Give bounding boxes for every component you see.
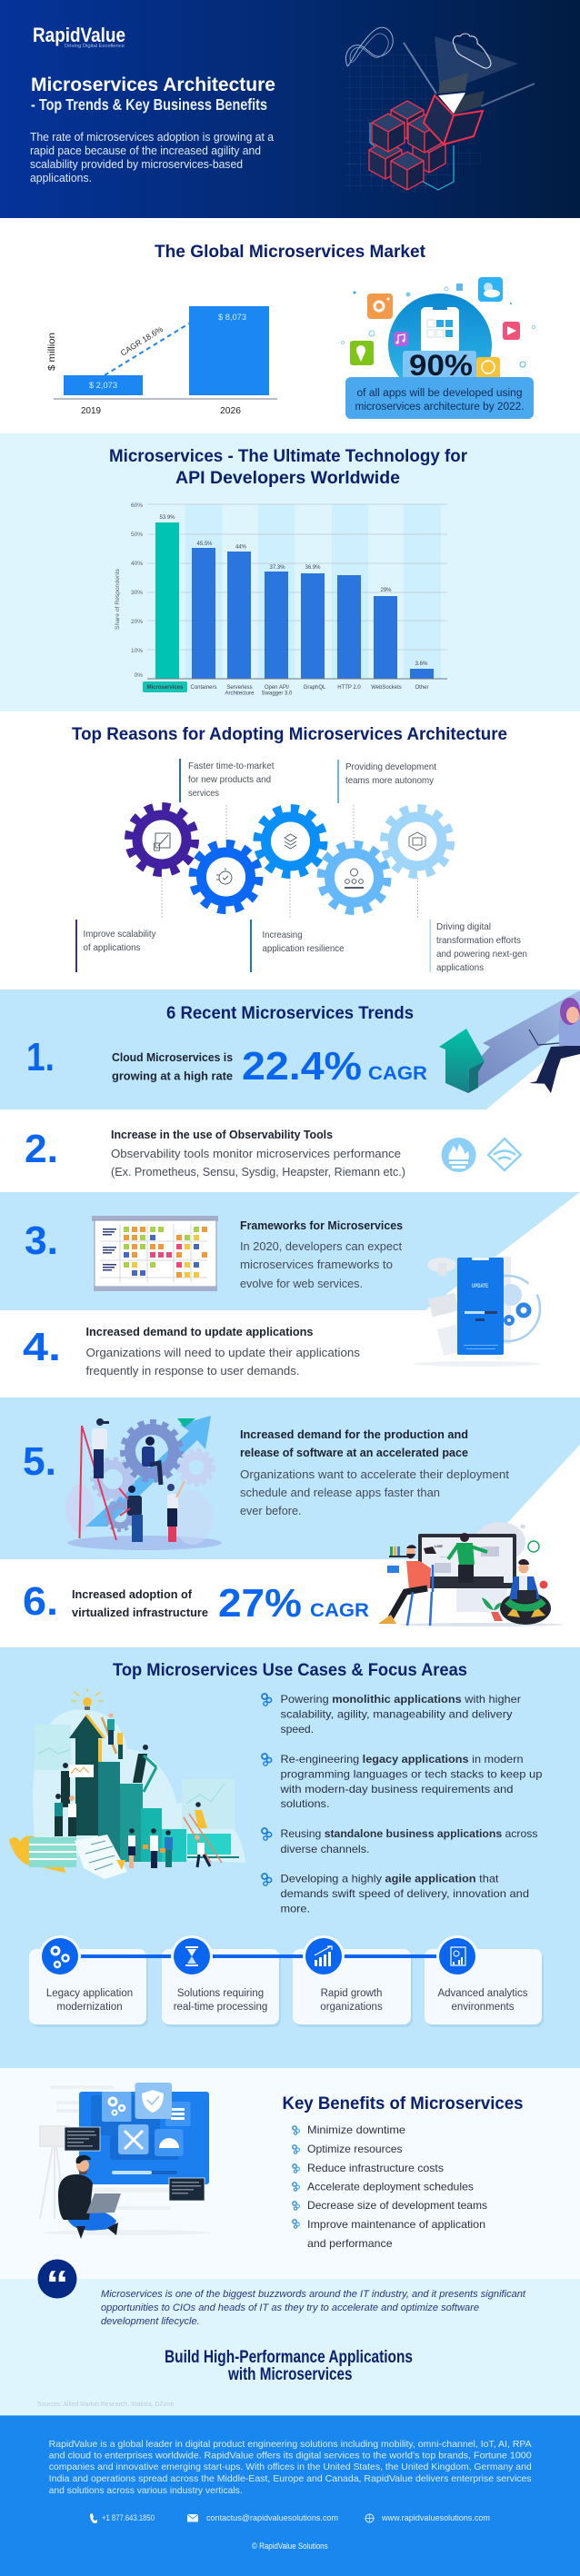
bar chart: share of respondents: 10%: [131, 648, 143, 654]
trend 4 text: frequently in response to user demands.: [85, 1365, 300, 1378]
reason: scalability: [75, 920, 156, 972]
use case: monolithic: Powering monolithic applications with higher: [280, 1693, 521, 1706]
bar chart: share of respondents: HTTP 2.0: [337, 685, 361, 691]
focus area cards: [29, 1935, 544, 2027]
panel: trend 2: [25, 1127, 521, 1179]
number 2: 2.: [25, 1127, 58, 1171]
benefits list: Decrease size of development teams: [307, 2199, 487, 2212]
bar chart: share of respondents: 20%: [131, 619, 143, 625]
stat: 22.4% CAGR: [242, 1044, 427, 1089]
company description: RapidValue is a global leader in digital product engineering solutions including mobility, omni-channel, IoT, AI, RPA: [49, 2439, 532, 2450]
reason: resilience: Increasing: [262, 930, 303, 940]
bar chart: share of respondents: Serverless: [226, 685, 253, 691]
person with telescope: [92, 1418, 109, 1478]
trend 1 text: Cloud Microservices is: [112, 1051, 233, 1064]
trend 2 text: [111, 1129, 405, 1179]
panel: API developers chart: [0, 433, 580, 711]
icon: location pin app: [350, 341, 374, 365]
contact: phone: [90, 2513, 155, 2523]
trend 6 text: [72, 1588, 208, 1619]
bar chart: share of respondents: [115, 502, 447, 696]
use case: legacy: programming languages or tech stacks to keep up: [280, 1768, 543, 1781]
card: legacy modernization: [29, 1949, 146, 2024]
bar chart: share of respondents: 53.9%: [159, 515, 175, 521]
company description: and cloud to enterprises worldwide. RapidValue offers its digital services to the world’s top brands, Fortune 1000: [49, 2451, 532, 2462]
caption box: [345, 377, 534, 419]
person lifting gear: [167, 1481, 185, 1542]
illustration: kanban board: [92, 1216, 218, 1291]
panel: top reasons: [72, 724, 527, 973]
reason: faster time to market: services: [188, 788, 219, 799]
reason: team autonomy: teams more autonomy: [345, 775, 435, 786]
intro paragraph: applications.: [30, 172, 92, 184]
gear 2: time to market: [193, 844, 258, 910]
illustration: team building gears: [65, 1416, 222, 1550]
card: real-time processing: real-time processing: [174, 2002, 267, 2013]
use case: standalone: Reusing standalone business applications across: [280, 1827, 538, 1840]
plant: [482, 1597, 503, 1621]
trend 3 text: [240, 1219, 403, 1290]
bar chart: share of respondents: Microservices: [146, 685, 184, 691]
card: analytics: Advanced analytics: [437, 1988, 528, 1999]
intro paragraph: scalability provided by microservices-based: [30, 158, 243, 171]
heading: market: The Global Microservices Market: [155, 242, 425, 262]
reason: resilience: application resilience: [262, 943, 345, 954]
bar chart: share of respondents: Swagger 3.0: [262, 691, 293, 696]
use case: legacy: solutions.: [280, 1797, 329, 1810]
benefits list: [293, 2123, 487, 2250]
benefits list: Reduce infrastructure costs: [307, 2162, 444, 2174]
gear 3: resilience: [258, 809, 324, 874]
card: analytics: [425, 1949, 542, 2024]
illustration: team climbing stair arrow: [9, 1688, 245, 1879]
reason: faster time to market: [179, 759, 275, 802]
intro paragraph: The rate of microservices adoption is growing at a: [30, 131, 274, 144]
person with wrench: [119, 1486, 143, 1542]
icon: Prometheus: [442, 1138, 476, 1172]
stat: 27% CAGR: [218, 1581, 369, 1626]
bar chart: share of respondents: Architecture: [225, 691, 255, 696]
bar chart: share of respondents: 37.3%: [269, 565, 285, 571]
icon: music app: [394, 332, 408, 346]
sources: Sources: Allied Market Research, Statista, DZone: [37, 2402, 174, 2408]
climbing ladder people: [102, 1714, 123, 1759]
illustration: virtual event presenters around monitor: LIVE: [435, 1544, 443, 1548]
card: real-time processing: Solutions requiring: [177, 1988, 264, 1999]
use case: monolithic: scalability, agility, manageability and delivery: [280, 1708, 513, 1721]
trend 4 text: Organizations will need to update their applications: [85, 1347, 360, 1359]
trend 3 text: In 2020, developers can expect: [240, 1240, 403, 1253]
use case: legacy: with modern-day business requirements and: [279, 1783, 513, 1795]
quote text: opportunities to CIOs and heads of IT as they try to accelerate and optimize software: [101, 2302, 479, 2313]
icon: quote mark: “: [45, 2263, 69, 2305]
heading: key benefits: Key Benefits of Microservices: [282, 2094, 524, 2114]
reason: resilience: [250, 920, 345, 972]
reason: faster time to market: for new products and: [188, 774, 271, 785]
footer: [0, 2415, 580, 2576]
benefits list: Minimize downtime: [307, 2123, 405, 2136]
company description: and solutions across various industry verticals.: [49, 2485, 243, 2496]
trend 4 text: Increased demand to update applications: [85, 1326, 314, 1338]
reason: scalability: of applications: [84, 942, 140, 953]
illustration: red cubes with cloud and infinity loop: [345, 27, 535, 195]
bar chart: market size: $ 2,073: [89, 381, 117, 391]
use case: standalone: [262, 1827, 538, 1855]
trend 5 text: [240, 1428, 510, 1517]
bar chart: share of respondents: 0%: [135, 672, 143, 679]
use case: legacy: [262, 1753, 543, 1810]
card: legacy modernization: Legacy application: [46, 1988, 133, 1999]
stat: 22.4% CAGR: CAGR: [368, 1063, 427, 1084]
company description: India and operations spread across the Middle-East, Europe and Canada, RapidValue delivers enterprise services: [49, 2473, 532, 2484]
badge: 90%: 90%: [409, 349, 473, 382]
panel: trend 3: [0, 1192, 580, 1310]
icon: growth chart: [303, 1935, 345, 1977]
contact: email: contactus@rapidvaluesolutions.com: [206, 2513, 338, 2523]
icon: gears: [39, 1935, 81, 1977]
benefits list: and performance: [307, 2237, 393, 2250]
person seated in gear: [142, 1437, 161, 1485]
intro paragraph: rapid pace because of the increased agility and: [30, 144, 261, 157]
bar chart: share of respondents: 50%: [131, 532, 143, 538]
trend 2 text: Observability tools monitor microservices performance: [111, 1148, 401, 1160]
illustration: developer with dashboard: [40, 2083, 211, 2239]
icon: hourglass: [171, 1935, 213, 1977]
trend 5 text: Increased demand for the production and: [240, 1428, 468, 1441]
bar chart: market size: 2019: [81, 405, 101, 416]
reason: digital transformation: Driving digital: [436, 921, 491, 932]
bar chart: share of respondents: 44%: [235, 545, 247, 551]
bar chart: share of respondents: 36.9%: [305, 565, 321, 571]
business people on stairs: [55, 1745, 156, 1836]
reason: digital transformation: applications: [436, 962, 484, 973]
reason: team autonomy: Providing development: [345, 761, 436, 772]
panel: global market: [47, 242, 535, 419]
trend 5 text: schedule and release apps faster than: [240, 1487, 440, 1499]
panel: trend 5: [0, 1397, 580, 1559]
seated man in red: [378, 1545, 436, 1626]
company description: companies and innovative emerging start-ups. With offices in the United States, the United Kingdom, Germany and: [49, 2462, 532, 2472]
contact: phone: +1 877.643.1850: [102, 2513, 155, 2523]
title: Microservices Architecture: [31, 75, 275, 95]
number 1: 1.: [26, 1035, 55, 1079]
logo: RapidValue: RapidValue: [33, 24, 125, 46]
gear 4: team autonomy: [322, 845, 387, 910]
caption box: of all apps will be developed using: [356, 388, 522, 399]
trend 4 text: [85, 1326, 360, 1378]
bar chart: share of respondents: GraphQL: [304, 685, 326, 691]
callout: 90 percent of apps: [342, 277, 535, 419]
header banner: [0, 0, 580, 218]
panel: trend 4: [23, 1257, 541, 1378]
panel: quote and call to action: [0, 2259, 580, 2415]
bar chart: market size: [47, 306, 277, 416]
bar chart: market size: CAGR 18.6%: [119, 324, 165, 358]
use case: agile: demands swift speed of delivery, innovation and: [280, 1887, 529, 1900]
number 6: 6.: [23, 1579, 58, 1624]
woman on beanbag: [500, 1559, 551, 1625]
benefits list: Optimize resources: [307, 2143, 403, 2155]
heading: use cases: Top Microservices Use Cases & Focus Areas: [113, 1660, 467, 1680]
card: rapid growth: organizations: [320, 2002, 383, 2013]
trend 3 text: evolve for web services.: [240, 1278, 363, 1290]
reason: scalability: Improve scalability: [84, 929, 156, 940]
trend 6 text: virtualized infrastructure: [72, 1606, 208, 1619]
trend 3 text: microservices frameworks to: [240, 1258, 393, 1271]
reason: team autonomy: [337, 760, 436, 803]
benefits list: Improve maintenance of application: [307, 2218, 485, 2231]
bar chart: share of respondents: Share of Respondents: [115, 568, 121, 630]
call to action: with Microservices: [227, 2364, 353, 2384]
card: legacy modernization: modernization: [56, 2002, 123, 2013]
use case: standalone: diverse channels.: [280, 1843, 369, 1855]
benefits list: Accelerate deployment schedules: [307, 2181, 474, 2193]
presenter in green: [448, 1533, 487, 1583]
trend 5 text: Organizations want to accelerate their deployment: [240, 1468, 510, 1481]
icon: analytics report: [436, 1935, 478, 1977]
panel: use cases: [0, 1647, 580, 2068]
gear 5: digital transformation: [385, 809, 450, 874]
use case: agile: Developing a highly agile application that: [280, 1873, 499, 1885]
use case: monolithic: speed.: [280, 1723, 314, 1736]
heading: top reasons: Top Reasons for Adopting Microservices Architecture: [72, 724, 507, 744]
illustration: phone update with gears: UPDATE: [472, 1283, 488, 1289]
trend 2 text: Increase in the use of Observability Tools: [111, 1129, 333, 1141]
reason: digital transformation: and powering next-gen: [436, 949, 527, 960]
card: real-time processing: [162, 1949, 279, 2024]
panel: key benefits: [0, 2068, 580, 2279]
use case list: [262, 1693, 543, 1915]
reason: digital transformation: transformation efforts: [436, 935, 521, 946]
use case: agile: [262, 1873, 529, 1915]
stat: 22.4% CAGR: 22.4%: [242, 1044, 362, 1089]
company description: [49, 2439, 532, 2496]
reason: faster time to market: Faster time-to-market: [188, 761, 275, 771]
woman on ladder: [184, 1802, 222, 1867]
use case: legacy: Re-engineering legacy applications in modern: [280, 1753, 524, 1765]
bar chart: share of respondents: 40%: [131, 561, 143, 567]
bar chart: share of respondents: 29%: [380, 588, 392, 593]
heading: API developers: API Developers Worldwide: [175, 468, 400, 488]
bar chart: share of respondents: WebSockets: [371, 685, 402, 691]
number 4: 4.: [23, 1325, 61, 1369]
bar chart: share of respondents: 45.5%: [196, 542, 213, 547]
intro paragraph: [30, 131, 274, 184]
card: analytics: environments: [451, 2002, 515, 2013]
bar chart: share of respondents: 30%: [131, 590, 143, 596]
light bulb: [72, 1688, 103, 1710]
icon: smartphone: [421, 307, 459, 354]
icon: play app: [503, 322, 520, 340]
trend 1 text: growing at a high rate: [112, 1070, 233, 1083]
bar chart: share of respondents: Other: [415, 685, 429, 691]
bar chart: share of respondents: 60%: [131, 502, 143, 509]
call to action: [165, 2347, 413, 2384]
people in foreground: [128, 1828, 173, 1868]
bar chart: market size: 2026: [220, 405, 241, 416]
trend 5 text: release of software at an accelerated pace: [240, 1447, 468, 1459]
heading: API developers: [109, 446, 467, 488]
bar chart: share of respondents: 3.6%: [415, 661, 428, 667]
illustration: virtual event presenters around monitor: [378, 1522, 564, 1626]
bar chart: share of respondents: Open API/: [265, 685, 290, 691]
use case: monolithic: [262, 1693, 521, 1736]
copyright: © RapidValue Solutions: [252, 2541, 328, 2551]
contact: website: www.rapidvaluesolutions.com: [381, 2513, 490, 2523]
trend 2 text: (Ex. Prometheus, Sensu, Sysdig, Heapster, Riemann etc.): [111, 1166, 405, 1179]
icon: camera app: [367, 293, 393, 319]
icon: quote mark: [38, 2259, 76, 2305]
illustration: phone update with gears: [414, 1257, 541, 1367]
icon: phone app: [476, 357, 500, 379]
gear 1: scalability: [129, 807, 195, 872]
trend 6 text: Increased adoption of: [72, 1588, 193, 1601]
quote text: [101, 2289, 526, 2327]
icon: Sensu: [488, 1139, 521, 1170]
number 3: 3.: [25, 1218, 58, 1263]
heading: trends: 6 Recent Microservices Trends: [166, 1003, 414, 1023]
stat: 27% CAGR: CAGR: [310, 1600, 369, 1621]
subtitle: - Top Trends & Key Business Benefits: [31, 95, 267, 114]
card: rapid growth: Rapid growth: [321, 1988, 382, 1999]
reason: digital transformation: [429, 920, 527, 973]
use case: agile: more.: [280, 1903, 310, 1915]
icon: cloud app: [478, 277, 503, 302]
number 5: 5.: [23, 1439, 56, 1484]
trend 5 text: ever before.: [240, 1505, 302, 1517]
heading: API developers: Microservices - The Ultimate Technology for: [109, 446, 467, 466]
card: rapid growth: [293, 1949, 411, 2024]
bar chart: market size: $ 8,073: [218, 313, 246, 323]
chart board: [69, 1765, 94, 1777]
panel: trend 6: [23, 1522, 564, 1626]
caption box: microservices architecture by 2022.: [355, 402, 524, 413]
quote text: Microservices is one of the biggest buzzwords around the IT industry, and it presents significant: [101, 2289, 526, 2300]
bar chart: share of respondents: Containers: [190, 685, 217, 691]
trend 3 text: Frameworks for Microservices: [240, 1219, 403, 1232]
quote text: development lifecycle.: [101, 2316, 200, 2327]
trend 1 text: [112, 1051, 233, 1083]
call to action: Build High-Performance Applications: [165, 2347, 413, 2367]
logo: RapidValue: Driving Digital Excellence: [65, 44, 125, 49]
illustration: rising arrow with woman and laptop: [439, 990, 580, 1093]
stat: 27% CAGR: 27%: [218, 1581, 302, 1626]
panel: trend 1: [0, 990, 580, 1109]
bar chart: market size: $ million: [47, 333, 57, 371]
